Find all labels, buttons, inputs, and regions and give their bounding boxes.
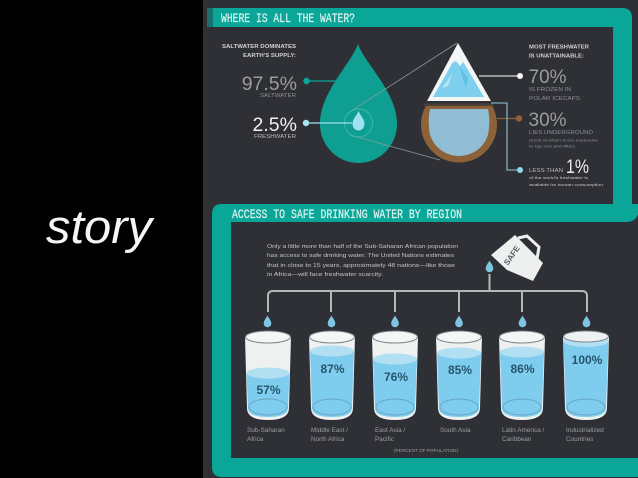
infographic background: [203, 0, 638, 478]
header band: [207, 8, 632, 210]
region labels: Pacific: [375, 436, 395, 443]
stat: 30%: to tap into and filter): [529, 144, 576, 148]
text block: intro: has access to safe drinking water. The United Nations estimates: [267, 253, 454, 259]
icon: falling drop: [486, 260, 493, 272]
note: percent of population: (PERCENT OF POPULATION): [394, 448, 458, 454]
stat: less than 1%: LESS THAN: [529, 168, 563, 174]
connector: 1% marker: [491, 103, 523, 173]
glass: south asia 85%: 85%: [448, 363, 472, 377]
text block: intro: [267, 244, 458, 278]
heading: WHERE IS ALL THE WATER?: [221, 12, 355, 26]
glass: middle east 87%: [309, 331, 355, 420]
region labels: [247, 427, 604, 443]
region labels: Sub-Saharan: [247, 427, 285, 434]
stat: 2.5% freshwater: FRESHWATER: [254, 134, 296, 140]
stat: 30%: (most of which is too expensive: [529, 138, 599, 142]
text: most freshwater: IS UNATTAINABLE:: [529, 54, 584, 60]
stat: 70%: [528, 67, 580, 102]
glass: latin america 86%: [499, 331, 545, 420]
stat: 70%: 70%: [528, 67, 567, 88]
icon: safe pitcher: SAFE: [502, 244, 522, 267]
glass: sub-saharan africa 57%: 57%: [256, 383, 281, 397]
text block: intro: that in close to 15 years, approximately 48 nations—like those: [267, 263, 456, 269]
glass: industrialized 100%: [563, 331, 609, 420]
stat: less than 1%: of the world's freshwater is: [529, 175, 588, 180]
text block: intro: in Africa—will face freshwater scarcity.: [267, 272, 383, 278]
glass: industrialized 100%: 100%: [572, 353, 603, 367]
stat: less than 1%: 1%: [566, 157, 589, 178]
text: saltwater intro: [222, 44, 296, 59]
stat: 30%: [528, 110, 599, 148]
panel: where is all the water: [207, 8, 632, 210]
stat: 70%: IS FROZEN IN: [529, 87, 571, 93]
heading: ACCESS TO SAFE DRINKING WATER BY REGION: [232, 208, 462, 222]
connector: 70% marker: [479, 73, 523, 79]
glass: east asia 76%: [372, 331, 418, 420]
icon: small freshwater drop in circle: [344, 109, 372, 137]
zoom lines from small drop: [348, 43, 457, 160]
icon: safe pitcher: [491, 235, 543, 281]
connector: freshwater marker: [303, 120, 352, 126]
glass: south asia 85%: [436, 331, 482, 420]
stat: less than 1%: available for human consumption: [529, 182, 603, 187]
stat: 97.5% saltwater: SALTWATER: [260, 93, 296, 99]
stat: 70%: POLAR ICECAPS: [529, 96, 580, 102]
pipes: [268, 274, 587, 312]
teal frame: [212, 204, 638, 477]
region labels: Latin America /: [502, 427, 544, 434]
panel: access to safe drinking water: [212, 204, 638, 477]
stat: 97.5% saltwater: 97.5%: [242, 73, 297, 95]
icon: iceberg above water: [427, 43, 491, 101]
glass: middle east 87%: 87%: [320, 362, 345, 376]
text: most freshwater: [529, 44, 590, 60]
connector: 30% marker: [497, 115, 522, 122]
stat: 2.5% freshwater: 2.5%: [253, 114, 297, 136]
region labels: East Asia /: [375, 427, 405, 434]
region labels: North Africa: [311, 436, 345, 443]
region labels: Caribbean: [502, 436, 532, 443]
stat: less than 1%: [529, 157, 603, 187]
stat: 30%: LIES UNDERGROUND: [529, 130, 593, 136]
region labels: Countries: [566, 436, 593, 443]
text: saltwater intro: SALTWATER DOMINATES: [222, 44, 296, 50]
drops above glasses: [264, 316, 590, 327]
text block: intro: Only a little more than half of the Sub-Saharan African population: [267, 244, 458, 250]
glass: east asia 76%: 76%: [384, 370, 408, 384]
region labels: Industrialized: [566, 427, 604, 434]
icon: big teal water drop: [320, 44, 397, 163]
region labels: Middle East /: [311, 427, 348, 434]
text: saltwater intro: EARTH'S SUPPLY:: [243, 53, 296, 59]
glass: latin america 86%: 86%: [510, 362, 535, 376]
text: most freshwater: MOST FRESHWATER: [529, 44, 590, 50]
glass: sub-saharan africa 57%: [245, 331, 291, 420]
slide caption: story: story: [46, 200, 155, 253]
icon: underground water: [421, 104, 497, 162]
region labels: Africa: [247, 436, 264, 443]
region labels: South Asia: [440, 427, 471, 434]
stat: 30%: 30%: [528, 110, 567, 131]
connector: saltwater marker: [303, 78, 337, 84]
